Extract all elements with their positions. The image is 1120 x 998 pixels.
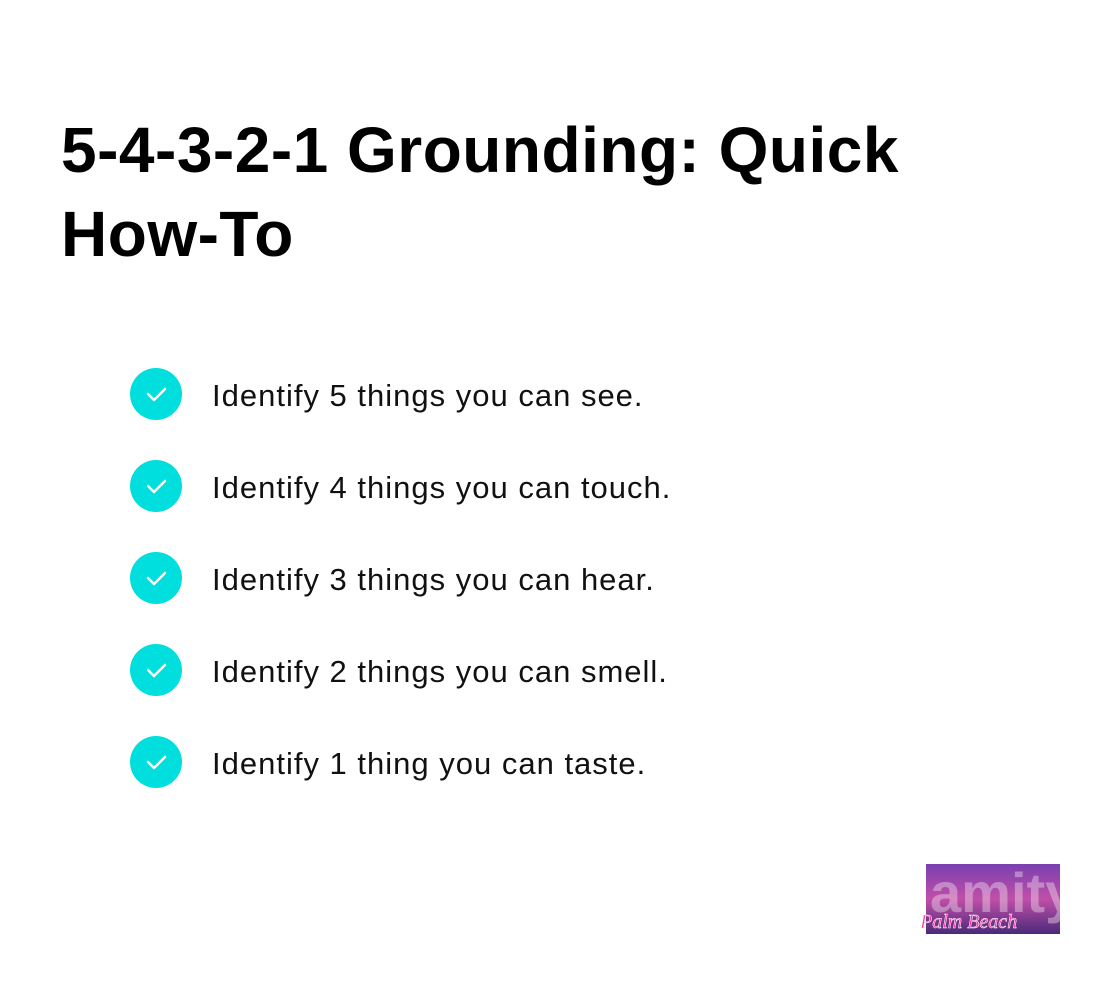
item 2: [130, 460, 671, 512]
item 3: Identify 3 things you can hear.: [212, 562, 655, 597]
item 3: [130, 552, 655, 604]
item 2: Identify 4 things you can touch.: [212, 470, 671, 505]
item 1: Identify 5 things you can see.: [212, 378, 644, 413]
title: How-To: [61, 198, 294, 270]
list: steps: [130, 368, 671, 788]
logo: Palm Beach: [919, 911, 1017, 933]
title: 5-4-3-2-1 Grounding: Quick: [61, 114, 899, 186]
item 4: [130, 644, 668, 696]
title: [61, 114, 899, 270]
item 4: Identify 2 things you can smell.: [212, 654, 668, 689]
item 5: Identify 1 thing you can taste.: [212, 746, 646, 781]
item 1: [130, 368, 644, 420]
item 5: [130, 736, 646, 788]
